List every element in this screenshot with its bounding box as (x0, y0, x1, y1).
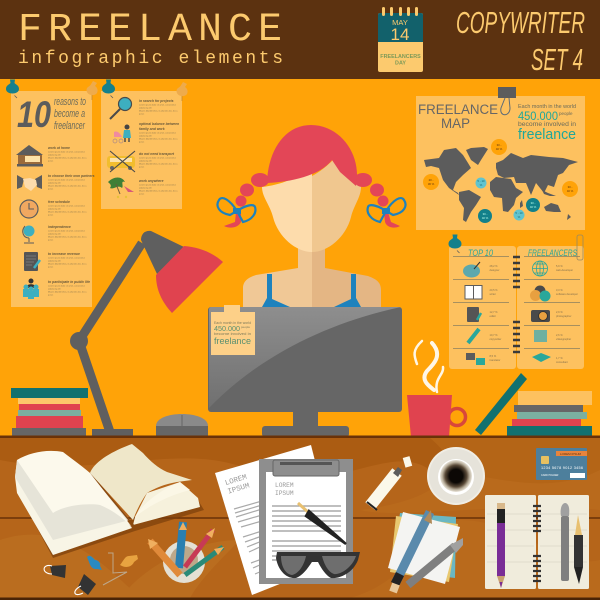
text: free schedule: Lorem ipsum dolor sit amet, consectetur (48, 204, 85, 208)
right column values: 2,6 % (556, 333, 563, 337)
sticky note: Each month in the world (214, 321, 251, 325)
map data bubbles: 40 % (530, 205, 537, 209)
marker (367, 456, 412, 510)
credit card: CARD HOLDER (541, 474, 559, 477)
icon: pen (468, 329, 479, 343)
notebook headings: TOP 10 (468, 248, 494, 259)
calendar icon: DAY (395, 60, 406, 66)
text: public life (48, 280, 90, 296)
blue pin (87, 556, 102, 570)
icon: crossed out bus (107, 151, 135, 172)
right column values: web-developer (556, 268, 573, 272)
panel: top 10 freelancers notebook (448, 234, 584, 369)
right column values: 5,9 % (556, 264, 563, 268)
map data bubbles (423, 139, 578, 223)
left column values: 20,5 % (490, 288, 498, 292)
text: work at home: work at home (48, 146, 70, 150)
text: family balance: family and work (139, 127, 166, 131)
right column values: software developer (556, 292, 578, 296)
sheet lines (272, 506, 341, 560)
text: work anywhere (139, 179, 178, 196)
text: independence: adipiscing elit (48, 232, 61, 236)
pencil (393, 510, 432, 592)
right column values: 3,3 % (556, 288, 563, 292)
icon: graduation cap (532, 353, 551, 362)
notebook lines (487, 514, 587, 562)
text: family balance: Lorem ipsum dolor sit amet, consectetur (139, 132, 176, 134)
icon: house (16, 145, 43, 166)
flyer heading: freelancer (54, 120, 86, 132)
text: income (48, 252, 87, 268)
icon: handshake (17, 175, 42, 191)
map data bubbles: 40 % (567, 189, 574, 193)
clipboard (259, 459, 360, 584)
paper lines (234, 501, 262, 574)
heading: copywriter set 4 (456, 5, 585, 77)
map data bubbles: 5 - 10 (477, 179, 485, 183)
text: free schedule: Mauris blandit tellus, in pharetra leo, leo a (48, 210, 87, 214)
text: public life: Mauris blandit tellus, in pharetra leo, leo a (48, 290, 87, 294)
text: free schedule: free schedule (48, 200, 70, 204)
right column values: photographer (556, 314, 572, 318)
book shadow (17, 490, 204, 558)
fountain pen (574, 515, 583, 584)
calendar icon: 14 (391, 25, 409, 44)
map data bubbles: % (480, 183, 483, 187)
icon: discs (530, 286, 550, 302)
text: public life: purus (48, 294, 53, 296)
left top page (17, 451, 132, 527)
text: no transport: Lorem ipsum dolor sit amet, consectetur (139, 156, 176, 160)
credit card: 1234 5678 9012 3456 (541, 466, 583, 470)
text: independence: Lorem ipsum dolor sit amet, consectetur (48, 230, 85, 232)
loose paper sheet (215, 445, 340, 595)
text: projects: in search for projects (139, 99, 174, 103)
text: partners: to choose their own partners (48, 174, 95, 178)
left column values: editor (490, 314, 496, 318)
flyer heading: become a (54, 108, 85, 120)
spiral rings (533, 506, 541, 581)
gutter (90, 473, 134, 526)
left column values: 28,2 % (490, 264, 498, 268)
map heading: MAP (441, 116, 470, 131)
text: work at home: Lorem ipsum dolor sit amet, consectetur (48, 150, 85, 154)
pins (102, 80, 188, 101)
grey pen (561, 503, 569, 581)
text: partners: adipiscing elit (48, 182, 61, 184)
notebook headings: FREELANCERS (528, 248, 577, 259)
body (243, 245, 381, 307)
lorem ipsum: LOREM (275, 482, 294, 489)
face (262, 160, 361, 252)
map data bubbles: 40 % (482, 216, 489, 220)
map heading: FREELANCE (418, 102, 498, 117)
world map (424, 147, 578, 222)
text: income: Lorem ipsum dolor sit amet, consectetur (48, 256, 85, 260)
icon: palette (463, 262, 480, 278)
text: work anywhere: Lorem ipsum dolor sit amet, consectetur (139, 184, 176, 186)
sticky note: people (241, 325, 250, 329)
text: no transport: purus (139, 166, 144, 168)
left column values: designer (490, 268, 500, 272)
spiral rings (513, 257, 520, 352)
big number 10: 10 (17, 94, 51, 135)
grey pen (408, 538, 463, 585)
text: income: Mauris blandit tellus, in pharetra leo, leo a (48, 262, 87, 266)
icon: notepad (467, 307, 481, 322)
binder clip (44, 565, 66, 578)
map data bubbles: % (518, 215, 521, 219)
text: family balance: adipiscing elit (139, 134, 152, 138)
flyer: 10 reasons (6, 80, 98, 307)
header band (0, 0, 600, 79)
text: free schedule (48, 200, 87, 216)
lorem ipsum (275, 482, 294, 497)
calendar icon: MAY (392, 18, 408, 27)
text: income: purus (48, 266, 53, 268)
icon: chat bubbles (466, 353, 485, 365)
right page stack (133, 482, 200, 525)
text: family balance (139, 122, 179, 144)
left column values: 12,7 % (490, 310, 498, 314)
coffee mug with steam (407, 341, 466, 437)
map data bubbles: 20 - (429, 178, 433, 182)
calendar icon: FREELANCERS (380, 54, 421, 60)
open book (15, 444, 204, 558)
text: projects (139, 99, 178, 116)
icon: globe (23, 226, 34, 243)
paper clip (103, 553, 127, 585)
lorem ipsum: LOREM (224, 474, 249, 488)
text: family balance: optimal balance between (139, 122, 179, 126)
notebook headings (468, 248, 577, 259)
text: projects: adipiscing elit (139, 106, 152, 110)
right column values: consultant (556, 360, 568, 364)
credit card: LOREM IPSUM (560, 452, 582, 456)
lorem ipsum: IPSUM (275, 490, 294, 497)
left column values: 8,5 % (490, 354, 497, 358)
stack of books right (507, 391, 592, 437)
icon: notebook and pen (24, 252, 40, 271)
stat text: 450.000 (518, 111, 558, 123)
icon: clock (20, 200, 38, 218)
left column values (490, 264, 501, 362)
leaning ruler book (475, 373, 527, 435)
credit card (536, 448, 587, 480)
map data bubbles: 30 - (497, 143, 501, 147)
left braid and bow (217, 173, 269, 228)
stack of books left (11, 388, 88, 437)
text: no transport (139, 152, 178, 168)
stat text: freelance (518, 127, 576, 143)
text: work anywhere: adipiscing elit (139, 186, 152, 190)
stat text: become involved in (518, 122, 576, 128)
right column values: 2,9 % (556, 310, 563, 314)
right column values: 1,7 % (556, 356, 563, 360)
computer monitor (208, 305, 402, 437)
left page stack (15, 460, 132, 555)
text: partners: Lorem ipsum dolor sit amet, consectetur (48, 178, 85, 182)
text: public life: Lorem ipsum dolor sit amet, consectetur (48, 284, 85, 288)
pin and clip (448, 234, 583, 260)
icon: group of people (23, 278, 39, 299)
map data bubbles: 5 - 10 (515, 211, 523, 215)
desk lamp (70, 231, 223, 437)
icon: open book (465, 286, 482, 299)
subtitle: infographic elements (18, 49, 283, 69)
text: no transport: Mauris blandit tellus, in pharetra leo, leo a (139, 162, 178, 166)
text: work anywhere: purus (139, 192, 144, 196)
calendar icon (378, 7, 423, 72)
computer mouse (156, 414, 208, 437)
flyer heading: reasons to (54, 96, 86, 108)
left column values: 10,7 % (490, 333, 498, 337)
pins (6, 80, 98, 100)
stat text (518, 104, 576, 143)
hair (267, 125, 357, 186)
icon: globe (532, 261, 548, 276)
left column values: translator (490, 358, 500, 362)
right column values (556, 264, 578, 364)
sticky note: freelance (214, 336, 251, 347)
right column values: videographer (556, 337, 571, 341)
clipboard clip (273, 460, 339, 476)
orange pin (120, 555, 138, 567)
flyer: reasons continued (101, 80, 188, 209)
map data bubbles: 30 % (428, 182, 435, 186)
text: public life: adipiscing elit (48, 288, 61, 290)
text: partners: Mauris blandit tellus, in pharetra leo, leo a (48, 184, 87, 188)
purple pencil (497, 503, 505, 588)
text: partners: purus (48, 188, 53, 190)
coffee cup on saucer (427, 447, 485, 505)
icon: magnifier (110, 98, 132, 119)
title: FREELANCE (18, 8, 282, 53)
icon: palm tree (108, 178, 134, 198)
text: work at home: adipiscing elit (48, 154, 61, 156)
right braid and bow (354, 173, 406, 228)
icon: camera (531, 310, 550, 322)
map data bubbles: 30 - (531, 201, 535, 205)
lorem ipsum: IPSUM (227, 482, 251, 497)
icon: mother and stroller (113, 124, 131, 143)
text: independence: purus (48, 238, 53, 242)
text: work at home: Mauris blandit tellus, in pharetra leo, leo a (48, 156, 87, 160)
text: no transport: do not need transport (139, 152, 175, 156)
sticky note (211, 305, 255, 355)
right loose page (90, 444, 192, 520)
flyer heading (54, 96, 86, 132)
text: public life: to participate in public life (48, 280, 90, 284)
girl figure (217, 125, 406, 307)
icon: chip (534, 330, 547, 342)
text: partners (48, 174, 95, 190)
sunglasses (276, 552, 360, 578)
pen (298, 503, 346, 544)
binder clip (75, 574, 96, 595)
push pins and clips (44, 553, 138, 595)
text: projects: Lorem ipsum dolor sit amet, consectetur (139, 104, 176, 106)
left column values: writer (490, 292, 496, 296)
text: family balance: Mauris blandit tellus, in pharetra leo, leo a (139, 138, 178, 140)
pencil cup (148, 522, 224, 583)
text: independence: Mauris blandit tellus, in pharetra leo, leo a (48, 236, 87, 238)
text: income: to increase revenue (48, 252, 80, 256)
text: income: adipiscing elit (48, 260, 61, 262)
text: work at home: purus (48, 160, 53, 162)
text: projects: purus (139, 112, 144, 116)
text: work anywhere: work anywhere (139, 179, 164, 183)
text: independence: independence (48, 225, 71, 229)
binder clip (498, 87, 516, 115)
panel: freelance map (416, 87, 585, 230)
wooden desk (0, 436, 600, 600)
text: no transport: adipiscing elit (139, 160, 152, 162)
map data bubbles: 30 - (568, 185, 572, 189)
text: free schedule: adipiscing elit (48, 208, 61, 210)
map data bubbles: 30 - (483, 212, 487, 216)
text: independence (48, 225, 87, 242)
open notebook with pens (485, 495, 589, 589)
left column values: copywriter (490, 337, 501, 341)
stat text: Each month in the world (518, 104, 576, 110)
sticky note stack with pencil and pen (388, 510, 463, 592)
text: projects: Mauris blandit tellus, in pharetra leo, leo a (139, 110, 178, 112)
lorem ipsum (224, 474, 251, 497)
text: family balance: purus (139, 140, 144, 144)
sticky note: 450.000 (214, 324, 240, 333)
sticky note: become involved in (214, 331, 251, 336)
top straps (262, 274, 361, 307)
map data bubbles: 40 % (496, 147, 503, 151)
stat text: people (559, 111, 573, 116)
text: free schedule: purus (48, 214, 53, 216)
text: work at home (48, 146, 87, 162)
text: work anywhere: Mauris blandit tellus, in pharetra leo, leo a (139, 190, 178, 192)
page divider lines (453, 256, 580, 348)
map heading (418, 102, 498, 131)
